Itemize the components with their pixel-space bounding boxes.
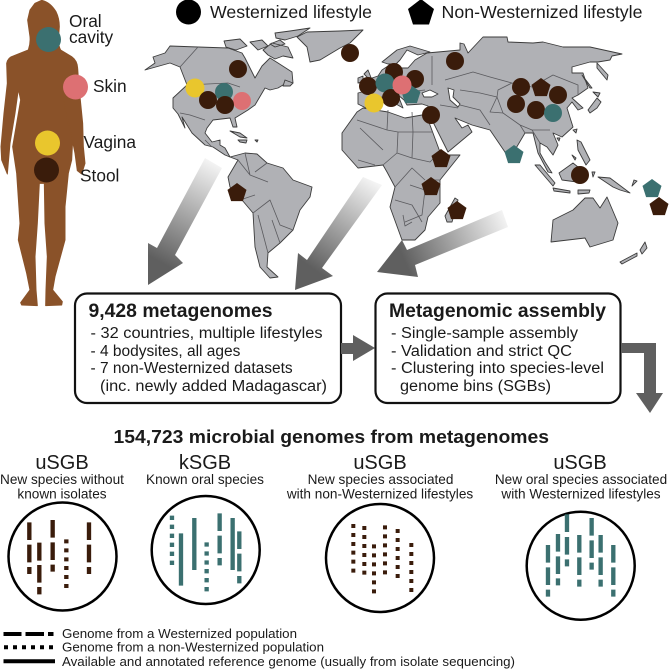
description: known isolates bbox=[17, 486, 107, 502]
panel: 9,428 metagenomes bbox=[75, 294, 341, 403]
label: Non-Westernized lifestyle: Non-Westernized lifestyle bbox=[442, 2, 642, 22]
land: Australia bbox=[551, 197, 618, 247]
markers: North America bbox=[186, 60, 251, 114]
legend: lifestyle markers bbox=[176, 0, 642, 24]
map markers: sample datasets bbox=[186, 44, 668, 219]
land: Africa bbox=[342, 108, 460, 240]
label: vagina: Vagina bbox=[84, 132, 136, 152]
site marker: stool bbox=[34, 158, 59, 182]
land: Madagascar bbox=[445, 198, 458, 222]
legend: genome line types bbox=[4, 626, 515, 669]
type label: kSGB bbox=[179, 452, 231, 474]
box heading: Metagenomic assembly bbox=[389, 301, 606, 322]
site marker: vagina bbox=[35, 130, 60, 156]
land: Caribbean bbox=[230, 131, 258, 143]
panel: uSGB new species bbox=[0, 452, 124, 610]
body silhouette bbox=[1, 0, 85, 306]
box list: - Validation and strict QC bbox=[391, 343, 572, 360]
arrow: Americas to metagenomes bbox=[148, 158, 222, 285]
box list: - 32 countries, multiple lifestyles bbox=[90, 325, 323, 342]
sample: non-Westernized dots bbox=[4, 645, 53, 649]
land: Southeast Asia islands bbox=[535, 140, 637, 194]
description: New oral species associated bbox=[495, 472, 667, 487]
panel: uSGB non-Westernized bbox=[286, 452, 473, 612]
panel: body sites bbox=[1, 0, 136, 306]
box heading: 9,428 metagenomes bbox=[88, 301, 272, 322]
box list: genome bins (SGBs) bbox=[400, 378, 551, 395]
box list: - Single-sample assembly bbox=[391, 325, 578, 342]
land: Eurasia bbox=[358, 37, 622, 173]
land: South America bbox=[228, 153, 312, 278]
panel: metagenomic assembly bbox=[376, 294, 620, 403]
type label: uSGB bbox=[35, 452, 89, 474]
circle with genome bars bbox=[152, 496, 260, 604]
site marker: skin bbox=[63, 74, 88, 100]
label: stool: Stool bbox=[80, 166, 119, 186]
box outline bbox=[376, 294, 620, 403]
land: Arctic islands bbox=[224, 28, 310, 86]
circle with genome bars bbox=[326, 504, 434, 612]
sample: Westernized dashes bbox=[4, 632, 54, 636]
markers: Asia bbox=[446, 52, 589, 184]
arrow: assembly to genomes bbox=[621, 343, 663, 413]
land: North America bbox=[145, 46, 293, 157]
arrow: metagenomes to assembly bbox=[341, 335, 375, 361]
description: Known oral species bbox=[146, 472, 264, 487]
arrow: Africa and Europe to metagenomes bbox=[295, 177, 382, 290]
water: Black Sea and Caspian bbox=[422, 88, 460, 107]
box list: - 4 bodysites, all ages bbox=[90, 343, 241, 360]
marker: Greenland bbox=[341, 44, 359, 62]
panel: uSGB Westernized bbox=[495, 452, 667, 620]
land: Scandinavia bbox=[382, 46, 430, 64]
box outline bbox=[75, 294, 341, 403]
label: Westernized population: Genome from a Westernized population bbox=[62, 626, 297, 641]
world map bbox=[145, 28, 647, 278]
icon: non-Westernized pentagon bbox=[408, 0, 434, 24]
land: Japan and Kamchatka bbox=[557, 63, 608, 141]
box list: - 7 non-Westernized datasets bbox=[90, 360, 293, 377]
markers: Europe bbox=[359, 63, 440, 124]
box list: - Clustering into species-level bbox=[391, 360, 604, 377]
description: New species associated bbox=[308, 472, 453, 487]
land: Greenland bbox=[297, 30, 363, 62]
label: reference genome: Available and annotated reference genome (usually from isolate sequencing) bbox=[62, 654, 515, 669]
markers: Oceania bbox=[642, 179, 668, 215]
description: New species without bbox=[0, 472, 124, 487]
arrow: Asia to metagenomes bbox=[377, 210, 508, 277]
sample: reference solid line bbox=[4, 659, 55, 663]
land: New Zealand bbox=[620, 242, 647, 264]
label: skin: Skin bbox=[93, 76, 127, 96]
marker: Peru pentagon bbox=[228, 183, 246, 201]
circle with genome bars bbox=[527, 512, 635, 620]
description: with Westernized lifestyles bbox=[500, 486, 661, 502]
label: oral cavity: cavity bbox=[69, 27, 114, 47]
country borders bbox=[180, 47, 578, 253]
label: non-Westernized population: Genome from a non-Westernized population bbox=[62, 640, 324, 654]
type label: uSGB bbox=[553, 452, 607, 474]
markers: Africa and Madagascar bbox=[422, 149, 466, 219]
circle with genome bars bbox=[8, 502, 116, 610]
land: British Isles bbox=[358, 70, 374, 84]
description: with non-Westernized lifestyles bbox=[286, 486, 473, 502]
icon: Westernized circle bbox=[176, 0, 201, 24]
site marker: oral cavity bbox=[36, 27, 61, 52]
panel: kSGB known oral species bbox=[146, 452, 264, 604]
label: oral cavity: Oral bbox=[69, 11, 102, 31]
type label: uSGB bbox=[353, 452, 407, 474]
heading: genomes total: 154,723 microbial genomes from metagenomes bbox=[114, 427, 549, 447]
box list: (inc. newly added Madagascar) bbox=[100, 378, 327, 395]
label: Westernized lifestyle: Westernized lifestyle bbox=[210, 2, 372, 22]
